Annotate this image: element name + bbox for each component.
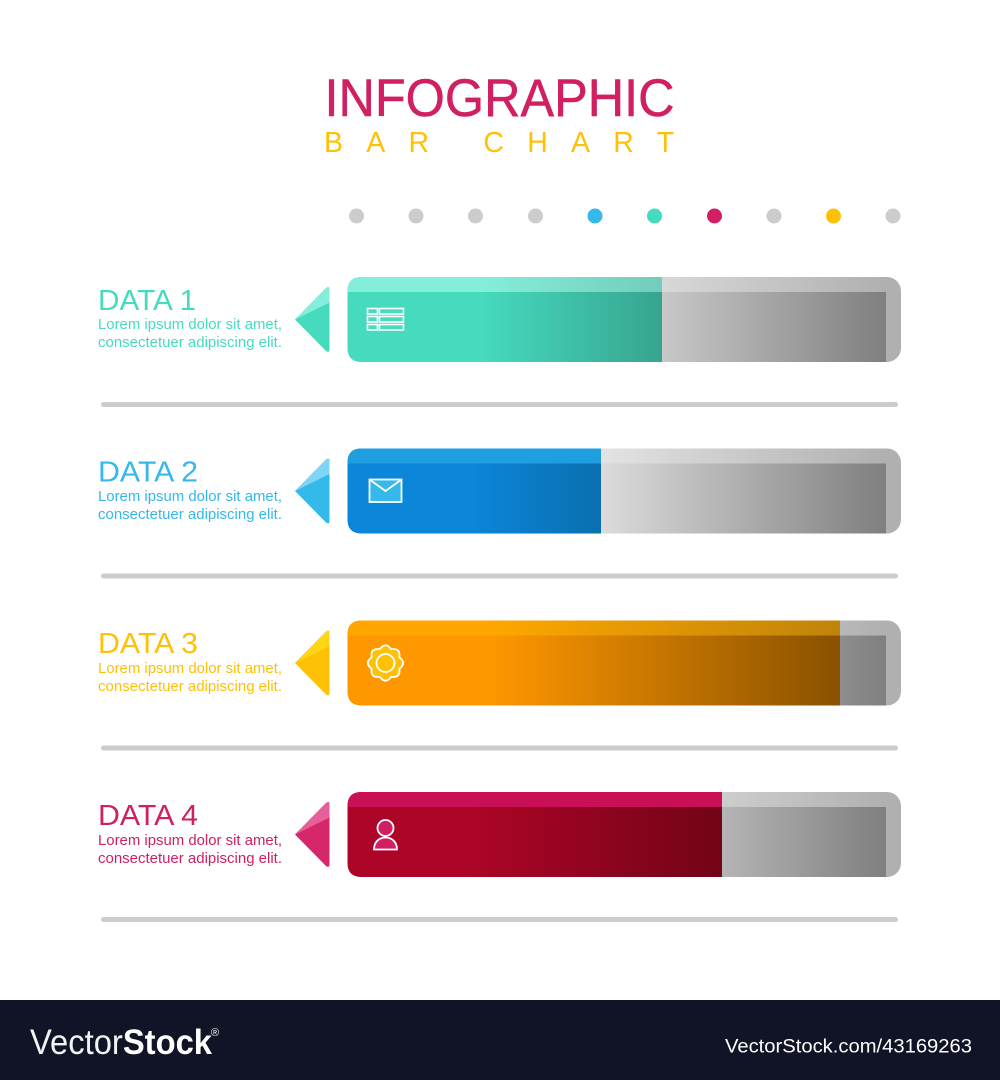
divider: [101, 917, 898, 922]
arrow: data 4: [295, 802, 330, 867]
bar fill: data 3: [348, 620, 840, 706]
footer band: [0, 1000, 1000, 1080]
arrow: data 1: [295, 287, 330, 352]
arrow: data 2: [295, 458, 330, 523]
bar track: data 3: [348, 620, 901, 706]
bar fill: data 1: [348, 277, 662, 362]
label: data 3: DATA 3: [98, 628, 198, 660]
row: data 4: [98, 792, 901, 877]
icon: person: [374, 820, 397, 850]
icon: envelope: [370, 480, 402, 502]
label: data 1: DATA 1: [98, 285, 196, 317]
description: data 3: consectetuer adipiscing elit.: [98, 679, 282, 695]
divider: [101, 746, 898, 750]
icon: list table: [368, 308, 404, 330]
description: data 3: Lorem ipsum dolor sit amet,: [98, 661, 282, 677]
divider: [101, 574, 898, 578]
row: data 3: [98, 620, 901, 706]
description: data 2: consectetuer adipiscing elit.: [98, 507, 282, 523]
label: data 4: DATA 4: [98, 800, 198, 832]
bar track: data 1: [348, 277, 901, 362]
arrow: data 3: [295, 630, 330, 695]
footer url: VectorStock.com/43169263: [725, 1036, 972, 1058]
divider: [101, 402, 898, 407]
bar track: data 2: [348, 448, 901, 534]
footer logo: VectorStock: [30, 1023, 212, 1062]
dot row: [349, 208, 900, 224]
title: INFOGRAPHIC: [324, 69, 674, 128]
bar track: data 4: [348, 792, 901, 877]
registered mark: ®: [211, 1027, 219, 1039]
icon: gear: [368, 645, 403, 681]
description: data 1: Lorem ipsum dolor sit amet,: [98, 317, 282, 333]
description: data 4: Lorem ipsum dolor sit amet,: [98, 833, 282, 849]
description: data 4: consectetuer adipiscing elit.: [98, 851, 282, 867]
label: data 2: DATA 2: [98, 456, 198, 488]
row: data 2: [98, 448, 901, 534]
description: data 2: Lorem ipsum dolor sit amet,: [98, 489, 282, 505]
bar fill: data 2: [348, 448, 601, 534]
bar fill: data 4: [348, 792, 722, 877]
subtitle: BAR CHART: [324, 127, 674, 159]
row: data 1: [98, 277, 901, 362]
description: data 1: consectetuer adipiscing elit.: [98, 335, 282, 351]
